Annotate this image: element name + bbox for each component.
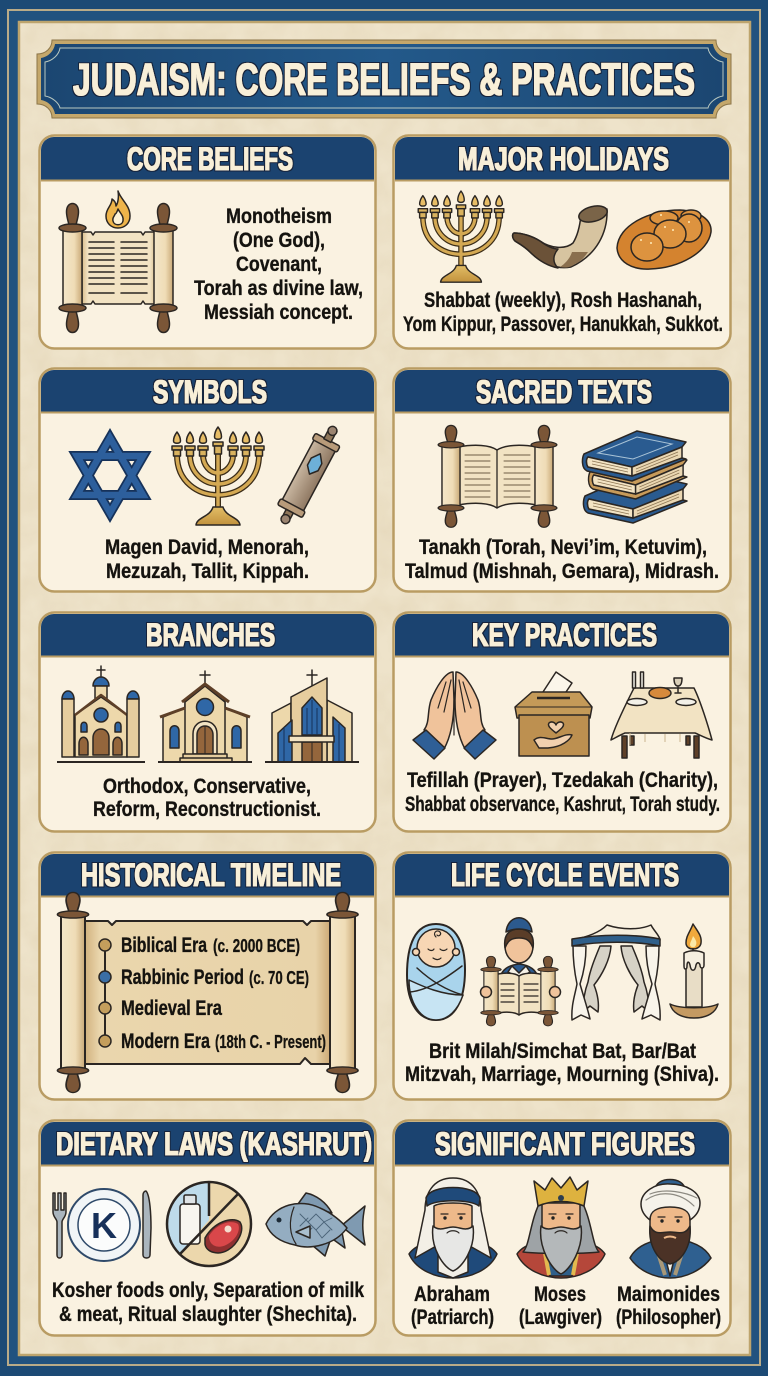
icon: torah scroll with flame xyxy=(59,191,177,332)
text: core beliefs: Torah as divine law, xyxy=(194,277,363,300)
icon: no mixing milk and meat xyxy=(167,1182,251,1266)
timeline: era labels: (c. 70 CE) xyxy=(249,968,309,988)
text: life cycle events xyxy=(405,1040,719,1086)
panel: major holidays xyxy=(394,136,730,348)
icon: mezuzah xyxy=(271,420,347,530)
icon: kosher plate with fork and knife xyxy=(53,1189,151,1261)
icon: reform synagogue xyxy=(265,670,359,762)
text: major holidays: Shabbat (weekly), Rosh Hashanah, xyxy=(424,289,702,312)
timeline: era labels: Rabbinic Period xyxy=(121,966,244,989)
icon: conservative synagogue xyxy=(158,671,252,762)
panel: symbols xyxy=(40,368,376,592)
text: dietary laws: Kosher foods only, Separation of milk xyxy=(52,1279,364,1302)
icon: bar mitzvah boy with torah xyxy=(480,918,560,1026)
icon: chuppah canopy xyxy=(572,925,660,1020)
heading: life cycle events: LIFE CYCLE EVENTS xyxy=(451,857,679,893)
icon: orthodox synagogue xyxy=(57,666,145,762)
panel: sacred texts xyxy=(394,368,730,592)
heading: key practices: KEY PRACTICES xyxy=(472,617,657,653)
icon: moses xyxy=(517,1177,605,1278)
text: core beliefs: Monotheism xyxy=(226,205,332,228)
timeline: era labels: Modern Era xyxy=(121,1030,210,1053)
icon: shabbat table xyxy=(611,672,712,758)
text: core beliefs xyxy=(194,205,363,324)
text: branches xyxy=(93,775,321,821)
text: life cycle events: Mitzvah, Marriage, Mourning (Shiva). xyxy=(405,1063,719,1086)
panel: dietary laws xyxy=(40,1120,376,1336)
text: core beliefs: (One God), xyxy=(233,229,325,252)
panel: historical timeline xyxy=(40,852,376,1100)
text: figure labels: Abraham xyxy=(414,1283,490,1306)
scroll: timeline background xyxy=(57,892,358,1093)
text: branches: Reform, Reconstructionist. xyxy=(93,798,321,821)
panel: core beliefs xyxy=(40,136,376,348)
icon: menorah xyxy=(172,427,264,525)
heading: branches: BRANCHES xyxy=(146,617,275,653)
text: key practices xyxy=(405,769,720,816)
text: branches: Orthodox, Conservative, xyxy=(103,775,311,798)
timeline: era labels: Biblical Era xyxy=(121,934,207,957)
title banner xyxy=(37,40,731,118)
timeline: era labels: (c. 2000 BCE) xyxy=(213,936,300,956)
text: figure labels xyxy=(411,1283,721,1329)
text: figure labels: Maimonides xyxy=(617,1283,720,1306)
timeline: era labels xyxy=(121,934,326,1053)
icon: abraham xyxy=(409,1178,497,1278)
timeline: era labels: Medieval Era xyxy=(121,997,222,1020)
heading: historical timeline: HISTORICAL TIMELINE xyxy=(81,857,341,893)
icon: swaddled baby xyxy=(407,924,465,1020)
timeline: era markers xyxy=(99,939,111,1047)
icon: star of david xyxy=(77,438,143,513)
text: key practices: Tefillah (Prayer), Tzedakah (Charity), xyxy=(407,769,718,792)
panel: branches xyxy=(40,612,376,832)
text: figure labels: Moses xyxy=(534,1283,586,1306)
icon: stack of books xyxy=(582,431,687,523)
text: core beliefs: Covenant, xyxy=(236,253,322,276)
icon: kosher plate with fork and knife: K xyxy=(91,1205,117,1246)
icon: menorah xyxy=(418,191,504,282)
icon: challah bread xyxy=(617,210,711,269)
text: dietary laws xyxy=(52,1279,364,1326)
heading: core beliefs: CORE BELIEFS xyxy=(127,141,293,177)
text: figure labels: (Lawgiver) xyxy=(519,1306,602,1329)
text: figure labels: (Patriarch) xyxy=(411,1306,494,1329)
text: symbols: Magen David, Menorah, xyxy=(105,536,309,559)
text: major holidays xyxy=(403,289,723,336)
panel: significant figures xyxy=(394,1120,730,1336)
heading: sacred texts: SACRED TEXTS xyxy=(476,374,652,410)
icon: praying hands xyxy=(413,672,496,759)
heading: dietary laws: DIETARY LAWS (KASHRUT) xyxy=(56,1126,372,1162)
icon: shofar xyxy=(513,203,609,268)
text: symbols xyxy=(105,536,309,583)
icon: tzedakah box xyxy=(515,672,592,756)
icon: memorial candle xyxy=(670,924,718,1018)
text: core beliefs: Messiah concept. xyxy=(204,301,353,324)
text: dietary laws: & meat, Ritual slaughter (Shechita). xyxy=(59,1303,357,1326)
icon: open torah scroll xyxy=(438,425,557,527)
text: figure labels: (Philosopher) xyxy=(616,1306,721,1329)
text: life cycle events: Brit Milah/Simchat Bat, Bar/Bat xyxy=(429,1040,696,1063)
heading: symbols: SYMBOLS xyxy=(153,374,267,410)
icon: fish xyxy=(266,1193,365,1256)
timeline: era labels: (18th C. - Present) xyxy=(215,1032,326,1052)
text: symbols: Mezuzah, Tallit, Kippah. xyxy=(106,560,309,583)
text: sacred texts: Tanakh (Torah, Nevi’im, Ketuvim), xyxy=(419,536,707,559)
icon: maimonides xyxy=(630,1180,711,1278)
text: sacred texts: Talmud (Mishnah, Gemara), Midrash. xyxy=(405,560,719,583)
panel: life cycle events xyxy=(394,852,730,1100)
text: sacred texts xyxy=(405,536,719,583)
panel: key practices xyxy=(394,612,730,832)
heading: major holidays: MAJOR HOLIDAYS xyxy=(458,141,669,177)
